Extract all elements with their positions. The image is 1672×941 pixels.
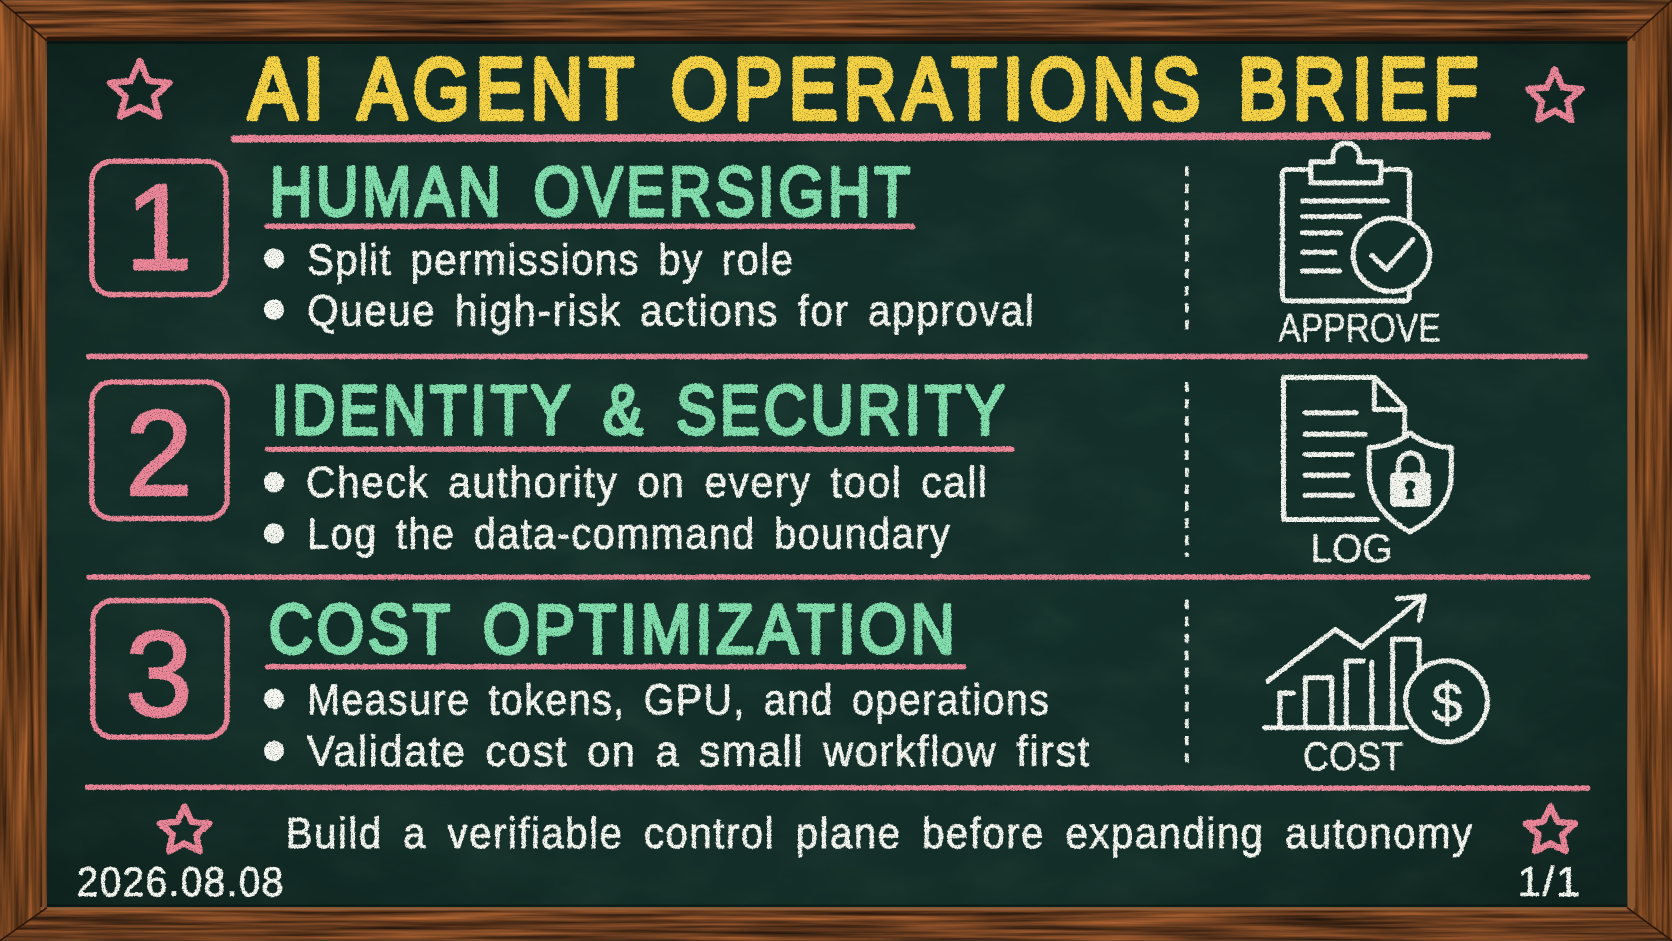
label: approve: APPROVE <box>1279 306 1441 350</box>
bullet list: Validate cost on a small workflow first <box>307 727 1091 776</box>
number badge 3: 3 <box>125 606 193 742</box>
bullet list: Measure tokens, GPU, and operations <box>307 676 1050 725</box>
heading: cost optimization: COST OPTIMIZATION <box>269 590 959 668</box>
footer <box>77 809 1581 905</box>
icon: clipboard approve <box>1282 143 1430 301</box>
panel: human oversight <box>92 143 1441 350</box>
title: AI AGENT OPERATIONS BRIEF <box>248 42 1484 138</box>
date: 2026.08.08 <box>77 858 285 905</box>
bullet list: Queue high-risk actions for approval <box>307 286 1035 335</box>
icon: rising cost chart <box>1265 596 1487 742</box>
bullet list: Check authority on every tool call <box>306 458 988 507</box>
heading: identity and security: IDENTITY & SECURITY <box>272 371 1009 449</box>
number badge 2 <box>92 382 227 521</box>
icon: document with shield <box>1284 378 1451 532</box>
decorative stars <box>110 61 1581 851</box>
label: log: LOG <box>1311 527 1393 571</box>
panel: identity and security <box>92 371 1451 571</box>
panel: cost optimization <box>93 590 1487 779</box>
number badge 1 <box>92 159 226 295</box>
bullet list <box>264 676 1091 776</box>
page number: 1/1 <box>1517 858 1581 905</box>
dollar sign: $ <box>1432 672 1462 734</box>
takeaway message: Build a verifiable control plane before expanding autonomy <box>286 809 1474 858</box>
bullet list: Split permissions by role <box>307 235 794 284</box>
heading: human oversight: HUMAN OVERSIGHT <box>270 153 914 231</box>
bullet list <box>264 235 1035 335</box>
number badge 1: 1 <box>125 159 193 295</box>
bullet list: Log the data-command boundary <box>307 509 951 558</box>
label: cost: COST <box>1303 735 1403 779</box>
number badge 3 <box>93 601 227 742</box>
number badge 2: 2 <box>125 385 193 521</box>
bullet list <box>264 458 988 558</box>
